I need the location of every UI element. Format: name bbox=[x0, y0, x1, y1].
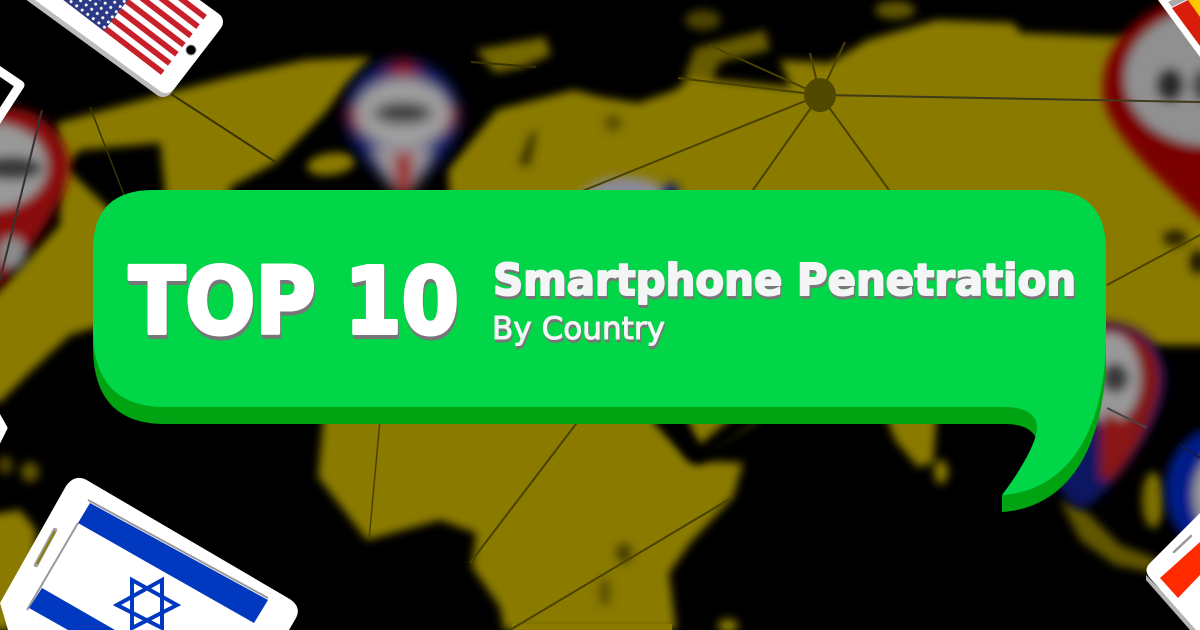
South America fragment bbox=[0, 510, 36, 630]
pin body bbox=[345, 60, 460, 195]
pin body bbox=[1165, 425, 1200, 555]
screen edge bbox=[27, 500, 268, 610]
southwest islets bbox=[0, 456, 13, 474]
phone body bbox=[0, 478, 298, 630]
flag stripe top bbox=[78, 503, 268, 623]
pin body bbox=[1048, 322, 1165, 508]
India bbox=[880, 400, 940, 467]
black inlets bbox=[654, 410, 760, 465]
Africa bbox=[318, 400, 743, 630]
heading: TOP 10: TOP 10 bbox=[129, 248, 459, 355]
location pin: left bbox=[0, 108, 70, 290]
bubble depth bbox=[93, 207, 1106, 512]
phone: Israel flag bbox=[0, 478, 298, 630]
flag stripe bottom bbox=[29, 588, 115, 630]
Southeast Asia islands bbox=[1060, 500, 1160, 572]
US flag bbox=[54, 0, 207, 75]
pin body bbox=[1103, 0, 1200, 240]
heading: Smartphone Penetration: Smartphone Penetration bbox=[493, 255, 1076, 306]
location pin: blue lower right bbox=[1165, 425, 1200, 555]
phone body bbox=[0, 0, 210, 87]
North America bbox=[57, 57, 371, 240]
pin body bbox=[0, 108, 70, 290]
phone speaker bbox=[36, 530, 55, 565]
phone: left edge bbox=[0, 66, 20, 446]
location pin: United Kingdom bbox=[345, 58, 460, 197]
pin value bbox=[0, 156, 42, 180]
Central America bbox=[0, 225, 120, 402]
phone: United States flag bbox=[0, 0, 213, 87]
bubble face bbox=[93, 190, 1106, 495]
phone shadow bbox=[1146, 575, 1200, 630]
pin value bbox=[1156, 68, 1184, 102]
phone: top right bbox=[1158, 0, 1200, 57]
red flag bbox=[1160, 542, 1200, 598]
location pin: top right bbox=[1103, 0, 1200, 240]
star of David bbox=[117, 580, 177, 628]
phone lower corner bbox=[0, 412, 5, 446]
flag red band bbox=[1172, 0, 1200, 46]
Arabian peninsula bbox=[680, 400, 770, 452]
island west of Europe bbox=[306, 150, 356, 178]
phone: bottom right bbox=[1146, 513, 1200, 630]
location pin: Thailand right of bubble bbox=[1048, 322, 1165, 508]
home button bbox=[186, 45, 196, 55]
location pin: behind bubble centre bbox=[577, 177, 680, 233]
pin value bbox=[373, 102, 433, 124]
Europe and Asia bbox=[448, 20, 1200, 345]
flag yellow band bbox=[1188, 0, 1200, 17]
Arctic island bbox=[476, 37, 551, 73]
network hub bbox=[804, 78, 836, 112]
phone body bbox=[1146, 513, 1200, 630]
Arctic arc island bbox=[684, 30, 770, 80]
Madagascar bbox=[718, 619, 738, 630]
pin value bbox=[1101, 363, 1129, 393]
speech bubble bbox=[93, 190, 1106, 512]
Africa bottom edge bbox=[512, 624, 672, 630]
bubble tail edge bbox=[1002, 485, 1040, 512]
Sri Lanka bbox=[934, 460, 948, 484]
speaker bbox=[1174, 536, 1191, 552]
map dark spots bbox=[518, 115, 1200, 606]
subheading: By Country: By Country bbox=[492, 311, 665, 347]
northern islets bbox=[685, 10, 721, 30]
